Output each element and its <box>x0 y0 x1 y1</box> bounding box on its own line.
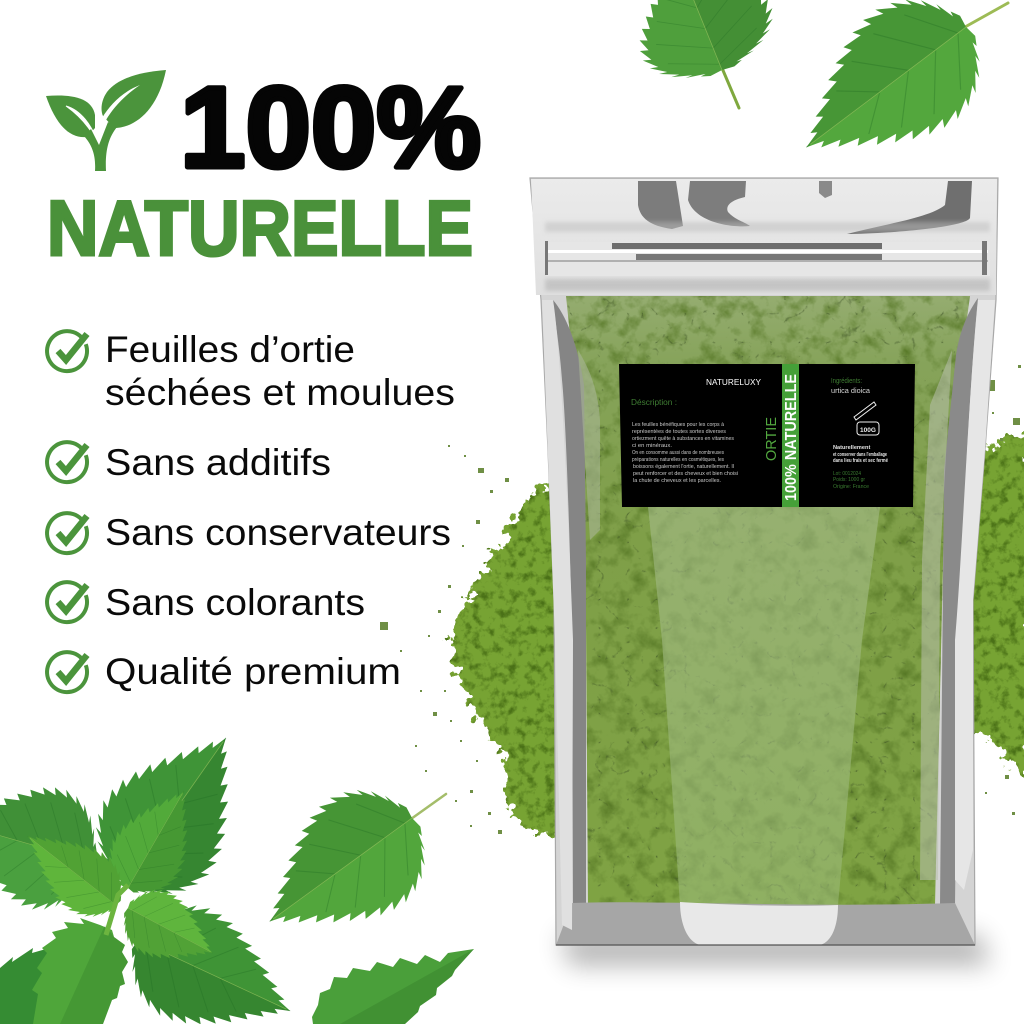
origin notes: Origine: France <box>833 484 869 490</box>
translucent centre panel <box>648 507 880 905</box>
right translucent fold <box>920 350 952 880</box>
bag body <box>530 178 998 945</box>
zipper <box>545 241 990 276</box>
left highlight strip <box>542 300 573 930</box>
sprig: upper small leaf <box>95 772 217 908</box>
description text: peut renforcer et des cheveux et bien choisi <box>633 471 738 477</box>
leaf bottom edge <box>312 949 474 1024</box>
description text: boissons également l'ortie, naturellement. Il <box>633 464 734 470</box>
sprig: centre stem <box>106 885 128 935</box>
storage notes: et conserver dans l'emballage <box>833 452 887 458</box>
sprig: right small leaf <box>111 877 229 983</box>
icon: opened jar <box>854 402 879 435</box>
nettle sprig bottom left <box>0 701 315 1024</box>
description text: représentées de toutes sortes diverses <box>632 429 726 435</box>
list: Sans colorants: Sans colorants <box>105 582 365 623</box>
sprig: lower left dark leaf <box>0 945 95 1024</box>
description text: la chute de cheveux et les parcelles. <box>633 478 721 484</box>
sprig: left small leaf <box>7 810 137 932</box>
icon: check <box>47 582 87 622</box>
logo: sprout <box>46 70 166 171</box>
description text: ortiezment quête à substances en vitamines <box>632 436 734 442</box>
product name: ORTIE <box>763 417 780 461</box>
ingredient: urtica dioica <box>831 386 871 395</box>
list: Feuilles d'ortie: séchées et moulues <box>105 372 455 413</box>
description text <box>632 422 738 484</box>
title: 100%: 100% <box>180 64 481 192</box>
sprig: upper right leaf <box>71 701 279 920</box>
storage notes: dans lieu frais et sec fermé <box>833 458 888 464</box>
product label <box>619 364 915 507</box>
origin notes <box>833 471 869 490</box>
right highlight strip <box>955 300 995 890</box>
label background <box>619 364 915 507</box>
list: Qualité premium: Qualité premium <box>105 651 401 692</box>
description text: Les feuilles bénéfiques pour les corps à <box>632 422 725 428</box>
powder specks <box>380 365 1021 834</box>
origin notes: Lot: 0012024 <box>833 471 861 477</box>
right gusset <box>940 298 978 905</box>
leaf bottom middle <box>232 765 451 974</box>
bottom band <box>556 902 975 945</box>
bottom edge <box>556 944 975 946</box>
leaf top centre <box>611 0 787 108</box>
title: NATURELLE: NATURELLE <box>47 184 473 272</box>
icon: opened jar: 100G <box>860 427 876 434</box>
description heading: Déscription : <box>631 397 677 407</box>
bag shadow <box>560 935 990 965</box>
list: Sans conservateurs: Sans conservateurs <box>105 512 451 553</box>
icon: check <box>47 331 87 371</box>
left translucent fold <box>578 350 600 540</box>
powder pile right <box>960 430 1024 780</box>
leaf top right <box>765 0 1009 202</box>
storage notes: Naturellement <box>833 445 870 451</box>
icon: check <box>47 442 87 482</box>
sprig: lower right leaf <box>111 886 315 1024</box>
bottom white panel <box>680 902 838 945</box>
brand: NATURELUXY <box>706 377 761 387</box>
list: Feuilles d'ortie: Feuilles d’ortie <box>105 329 355 370</box>
sprig: lower small leaf <box>32 918 128 1024</box>
description text: ci en minéraux. <box>632 443 672 449</box>
list: Sans additifs: Sans additifs <box>105 442 331 483</box>
description text: On en consomme aussi dans de nombreuses <box>632 450 724 456</box>
storage notes <box>833 445 888 464</box>
powder pile left <box>452 478 570 832</box>
origin notes: Poids: 1000 gr <box>833 477 865 483</box>
powder inside bag <box>560 290 970 910</box>
left gusset <box>553 300 586 905</box>
sprig: far left leaf <box>0 762 111 922</box>
icon: check <box>47 652 87 692</box>
icon: check <box>47 513 87 553</box>
product bag <box>530 178 998 945</box>
band text: 100% NATURELLE <box>783 374 800 501</box>
ingredients heading: Ingrédients: <box>831 378 862 385</box>
description text: préparations naturelles en cosmétiques, les <box>632 457 724 463</box>
green band <box>782 364 799 507</box>
bag header <box>531 179 997 295</box>
list: Feuilles d'ortie <box>47 329 455 413</box>
